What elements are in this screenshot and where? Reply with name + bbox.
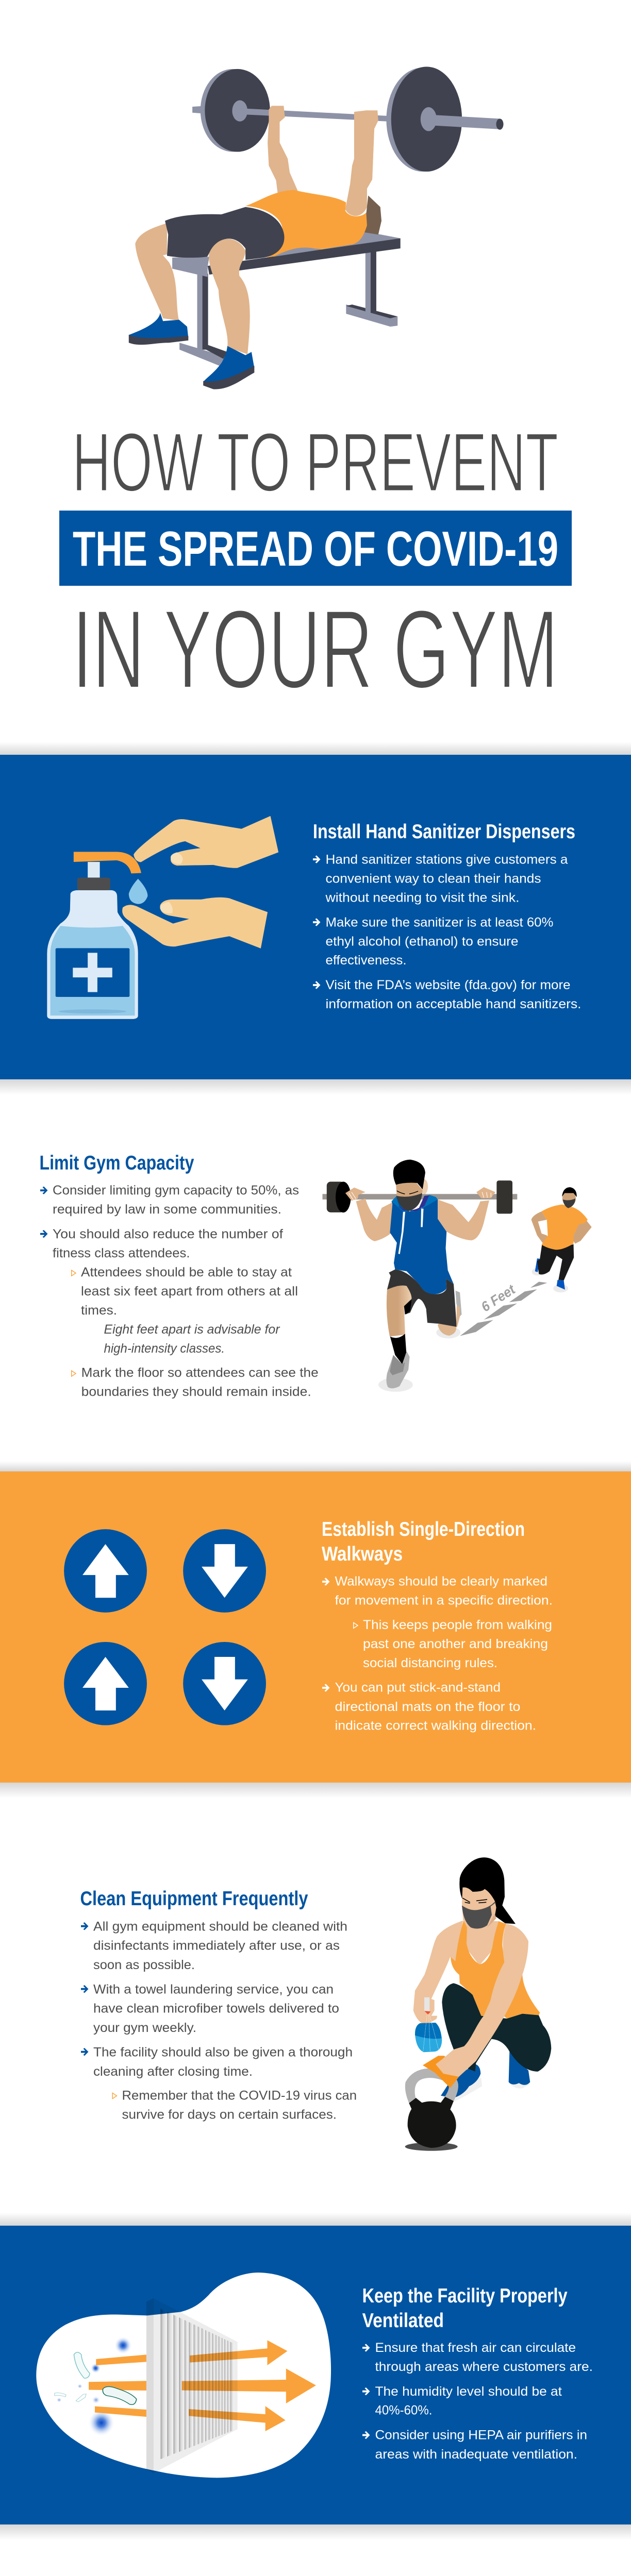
bullet list: survive for days on certain surfaces. <box>122 2108 337 2122</box>
bullet list: through areas where customers are. <box>375 2360 593 2374</box>
bullet list: Hand sanitizer stations give customers a <box>326 853 568 867</box>
bullet list: social distancing rules. <box>363 1656 497 1670</box>
bullet list: ethyl alcohol (ethanol) to ensure <box>326 935 519 949</box>
heading: Limit Gym Capacity <box>39 1152 194 1174</box>
bullet list: This keeps people from walking <box>363 1618 552 1632</box>
bullet list <box>40 1183 319 1399</box>
bullet list: required by law in some communities. <box>53 1202 281 1217</box>
panel: keep the facility properly ventilated <box>0 2226 631 2524</box>
bullet list: times. <box>81 1303 117 1318</box>
sub-bullet marker <box>72 1370 76 1377</box>
heading: Install Hand Sanitizer Dispensers <box>313 821 575 843</box>
bullet list: your gym weekly. <box>93 2021 196 2035</box>
bullet list: Remember that the COVID-19 virus can <box>122 2088 357 2103</box>
illustration: air filter with arrows <box>36 2273 331 2478</box>
section: clean equipment frequently <box>80 1857 551 2151</box>
bullet list: The humidity level should be at <box>375 2384 562 2399</box>
heading <box>362 2285 568 2332</box>
bullet list: You should also reduce the number of <box>53 1227 283 1241</box>
bullet arrow <box>322 1684 330 1692</box>
bullet list <box>313 853 582 1011</box>
bullet list: least six feet apart from others at all <box>81 1284 298 1298</box>
bullet list: Consider using HEPA air purifiers in <box>375 2428 587 2443</box>
illustration: two masked athletes six feet apart <box>323 1160 592 1392</box>
panel: establish single-direction walkways <box>0 1471 631 1783</box>
heading: Establish Single-Direction <box>322 1518 525 1540</box>
bullet list: Consider limiting gym capacity to 50%, as <box>53 1183 299 1198</box>
bullet list: indicate correct walking direction. <box>335 1719 536 1733</box>
heading: Keep the Facility Properly <box>362 2285 568 2307</box>
bullet list: convenient way to clean their hands <box>326 872 541 886</box>
bullet list <box>81 1919 357 2122</box>
sub-bullet marker <box>72 1270 76 1276</box>
label: 6 feet: 6 Feet <box>478 1281 518 1315</box>
bullet list: information on acceptable hand sanitizers. <box>326 997 582 1011</box>
bullet arrow <box>322 1578 330 1586</box>
heading: Ventilated <box>362 2310 444 2332</box>
bullet list: disinfectants immediately after use, or as <box>93 1939 340 1953</box>
heading <box>322 1518 525 1565</box>
bullet list <box>322 1574 553 1733</box>
section: limit gym capacity <box>39 1152 592 1399</box>
sub-bullet marker <box>112 2093 117 2099</box>
bullet list: With a towel laundering service, you can <box>93 1982 334 1996</box>
bullet arrow <box>362 2344 370 2352</box>
bullet list: Make sure the sanitizer is at least 60% <box>326 915 554 929</box>
illustration: sanitizer bottle and hands <box>47 816 278 1019</box>
illustration: man bench pressing barbell <box>129 66 504 389</box>
bullet list: Attendees should be able to stay at <box>81 1265 292 1280</box>
bullet list: directional mats on the floor to <box>335 1700 521 1714</box>
icons: direction arrows in circles <box>64 1529 266 1725</box>
bullet list: without needing to visit the sink. <box>325 891 520 905</box>
bullet arrow <box>81 1922 89 1930</box>
heading: Walkways <box>322 1543 403 1565</box>
bullet arrow <box>313 855 321 863</box>
heading: Clean Equipment Frequently <box>80 1888 308 1910</box>
sub-bullet marker <box>354 1623 358 1628</box>
bullet list: Walkways should be clearly marked <box>335 1574 547 1589</box>
bullet arrow <box>362 2387 370 2395</box>
bullet arrow <box>362 2431 370 2439</box>
bullet list: All gym equipment should be cleaned with <box>93 1919 347 1934</box>
title <box>59 416 572 711</box>
bullet list <box>362 2341 593 2462</box>
bullet list: Visit the FDA’s website (fda.gov) for more <box>326 978 570 992</box>
title banner: the spread of covid-19 <box>59 511 572 586</box>
bullet arrow <box>313 918 321 926</box>
bullet list: cleaning after closing time. <box>93 2064 253 2079</box>
bullet list: soon as possible. <box>93 1958 195 1972</box>
bullet arrow <box>40 1187 47 1194</box>
bullet list: boundaries they should remain inside. <box>81 1385 311 1399</box>
illustration: woman wiping kettlebell with spray bottle <box>405 1857 551 2151</box>
bullet list: high-intensity classes. <box>104 1342 225 1356</box>
bullet list: areas with inadequate ventilation. <box>375 2447 577 2462</box>
bullet list: Mark the floor so attendees can see the <box>81 1366 319 1380</box>
bullet arrow <box>81 2048 89 2056</box>
bullet arrow <box>313 981 321 989</box>
bullet list: The facility should also be given a thorough <box>93 2045 353 2060</box>
bullet list: for movement in a specific direction. <box>335 1594 553 1608</box>
bullet list: You can put stick-and-stand <box>335 1681 501 1695</box>
bullet list: Eight feet apart is advisable for <box>104 1323 280 1337</box>
panel: install hand sanitizer dispensers <box>0 755 631 1079</box>
bullet list: have clean microfiber towels delivered to <box>93 2001 339 2015</box>
bullet arrow <box>81 1985 89 1993</box>
bullet list: 40%-60%. <box>375 2403 432 2417</box>
bullet list: Ensure that fresh air can circulate <box>375 2341 576 2355</box>
bullet list: past one another and breaking <box>363 1637 548 1651</box>
bullet list: fitness class attendees. <box>53 1246 190 1260</box>
bullet list: effectiveness. <box>326 953 406 968</box>
bullet arrow <box>40 1230 47 1238</box>
